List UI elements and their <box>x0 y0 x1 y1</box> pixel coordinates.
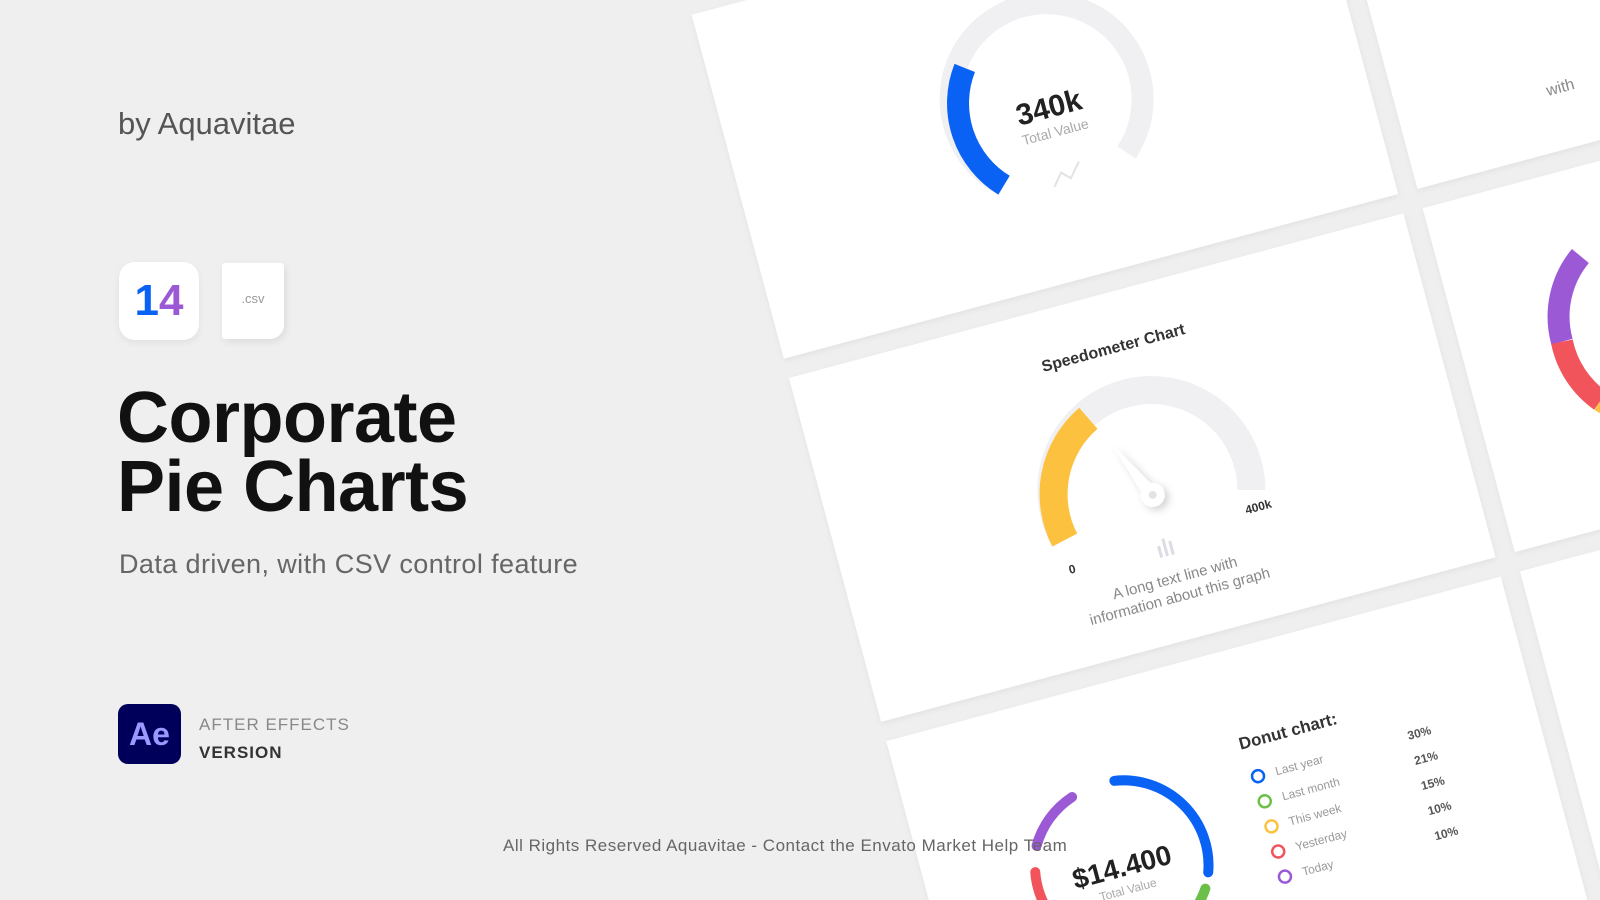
after effects version label <box>199 715 350 762</box>
card: total value gauge <box>692 0 1398 359</box>
card: donut chart: 10% <box>1433 823 1460 843</box>
card: total value gauge: Total Value <box>1020 115 1091 148</box>
icon: 14 badge: 14 <box>135 276 183 325</box>
card: donut chart: 10% <box>1426 798 1453 818</box>
after effects version label: VERSION <box>199 743 283 762</box>
card: right donut partial <box>1423 44 1600 552</box>
card: bottom-right partial <box>1520 407 1600 900</box>
card: donut chart: Yesterday <box>1294 826 1349 854</box>
card: donut chart: 21% <box>1413 748 1440 768</box>
footer: All Rights Reserved Aquavitae - Contact the Envato Market Help Team <box>503 836 1067 855</box>
card: donut chart: Donut chart: <box>1237 709 1339 754</box>
card: speedometer chart: 0 <box>1067 562 1077 577</box>
card: total value gauge: 340k <box>1012 83 1086 133</box>
card: speedometer chart <box>789 213 1495 722</box>
card: donut chart: 15% <box>1419 773 1447 793</box>
icon: after effects <box>118 704 181 764</box>
card: speedometer chart: Speedometer Chart <box>1040 321 1188 376</box>
after effects version label: AFTER EFFECTS <box>199 715 350 734</box>
icon: after effects: Ae <box>129 716 170 752</box>
card: donut chart: Today <box>1301 857 1335 879</box>
card: donut chart: $14.400 <box>1069 839 1175 895</box>
card: top-right partial: with <box>1544 76 1576 100</box>
card: donut chart <box>886 577 1593 900</box>
subtitle: Data driven, with CSV control feature <box>119 549 578 579</box>
card: speedometer chart: 400k <box>1244 497 1273 517</box>
card: donut chart: Last year <box>1274 752 1325 778</box>
icon: csv file <box>222 263 284 339</box>
card: speedometer chart: A long text line with <box>1111 554 1239 603</box>
card: donut chart: Last month <box>1280 774 1341 803</box>
card: speedometer chart: information about this graph <box>1088 564 1272 629</box>
author line: by Aquavitae <box>118 106 296 141</box>
card: donut chart: 30% <box>1406 723 1433 743</box>
title: Corporate <box>117 378 457 458</box>
title <box>117 378 468 527</box>
card: donut chart: This week <box>1287 801 1344 829</box>
title: Pie Charts <box>117 447 468 527</box>
icon: csv file: .csv <box>241 291 265 306</box>
card: top-right partial <box>1325 0 1600 189</box>
icon: 14 badge <box>119 262 199 340</box>
